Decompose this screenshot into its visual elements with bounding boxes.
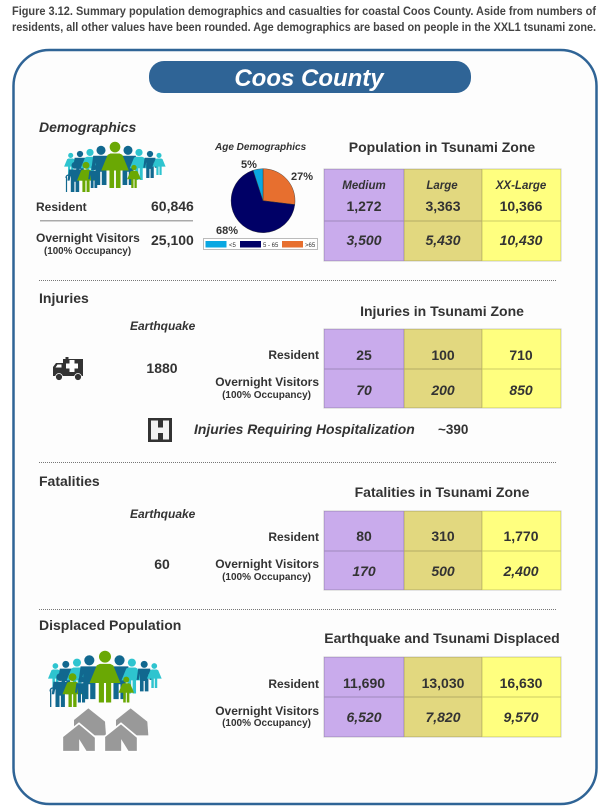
table: population in tsunami zone: XX-Large (495, 180, 547, 192)
caption (12, 6, 596, 34)
row labels: displaced: (100% Occupancy) (222, 718, 311, 729)
section: demographics (36, 119, 194, 257)
table: injuries in tsunami zone: 710 (509, 347, 533, 363)
pie chart: age demographics: 27% (291, 171, 313, 183)
row labels: displaced: Resident (268, 677, 319, 691)
row labels: displaced (215, 677, 319, 729)
value: earthquake injuries: 1880 (146, 360, 178, 376)
label: earthquake fatalities: Earthquake (130, 507, 196, 521)
table: population in tsunami zone: Large (426, 180, 458, 192)
table: fatalities in tsunami zone (324, 511, 561, 590)
heading: population in tsunami zone: Population in Tsunami Zone (349, 139, 535, 155)
heading: injuries in tsunami zone: Injuries in Tsunami Zone (360, 303, 524, 319)
row labels: injuries: (100% Occupancy) (222, 390, 311, 401)
row labels: injuries (215, 348, 319, 401)
pie chart: age demographics: 5% (241, 159, 257, 171)
table: injuries in tsunami zone: 200 (430, 382, 455, 398)
table: fatalities in tsunami zone: 80 (356, 528, 372, 544)
overnight visitors count: 25,100 (151, 232, 194, 248)
row labels: fatalities: Resident (268, 530, 319, 544)
chart legend: 5 - 65 (263, 243, 279, 249)
table: fatalities in tsunami zone: 310 (431, 528, 455, 544)
table: population in tsunami zone: 3,363 (425, 198, 461, 214)
table: earthquake and tsunami displaced: 16,630 (500, 675, 543, 691)
title banner (149, 61, 471, 93)
table: injuries in tsunami zone: 100 (431, 347, 455, 363)
table: injuries in tsunami zone: 25 (356, 347, 372, 363)
value: earthquake fatalities: 60 (154, 556, 170, 572)
resident count: Resident (36, 200, 87, 214)
table: earthquake and tsunami displaced: 11,690 (343, 675, 385, 691)
pie chart: age demographics: Age Demographics (214, 142, 307, 153)
icon: hospital (148, 418, 172, 442)
table: population in tsunami zone (324, 169, 561, 261)
icon: crowd of people (64, 142, 166, 192)
label: earthquake injuries: Earthquake (130, 319, 196, 333)
table: population in tsunami zone: 10,430 (500, 232, 543, 248)
overnight visitors count: Overnight Visitors (36, 231, 140, 245)
heading: fatalities: Fatalities (39, 473, 100, 489)
chart legend (204, 238, 318, 250)
hospitalization label: Injuries Requiring Hospitalization (194, 421, 415, 437)
overnight visitors count: (100% Occupancy) (44, 246, 131, 257)
title banner: Coos County (234, 65, 385, 92)
pie chart: age demographics (204, 142, 318, 250)
heading: demographics: Demographics (39, 119, 136, 135)
table: earthquake and tsunami displaced: 7,820 (425, 709, 461, 725)
heading: earthquake and tsunami displaced: Earthquake and Tsunami Displaced (324, 630, 560, 646)
table: fatalities in tsunami zone: 1,770 (503, 528, 539, 544)
table: population in tsunami zone: 5,430 (425, 232, 461, 248)
section: injuries (39, 290, 319, 401)
heading: displaced population: Displaced Population (39, 617, 181, 633)
chart legend: >65 (305, 243, 316, 249)
icon: ambulance (53, 357, 83, 380)
pie chart: age demographics: 68% (216, 225, 238, 237)
table: population in tsunami zone: 10,366 (500, 198, 543, 214)
table: injuries in tsunami zone: 850 (509, 382, 533, 398)
row labels: fatalities (215, 530, 319, 583)
resident count (36, 198, 194, 214)
row labels: injuries: Overnight Visitors (215, 375, 319, 389)
icon: crowd of people, displaced (48, 651, 162, 707)
table: population in tsunami zone: 3,500 (346, 232, 382, 248)
table: fatalities in tsunami zone: 2,400 (502, 563, 539, 579)
row labels: displaced: Overnight Visitors (215, 704, 319, 718)
table: earthquake and tsunami displaced: 13,030 (422, 675, 465, 691)
row labels: injuries: Resident (268, 348, 319, 362)
table: fatalities in tsunami zone: 170 (352, 563, 376, 579)
chart legend: <5 (229, 243, 237, 249)
icon: houses (62, 708, 148, 752)
row labels: fatalities: Overnight Visitors (215, 557, 319, 571)
heading: fatalities in tsunami zone: Fatalities in Tsunami Zone (355, 484, 530, 500)
table: fatalities in tsunami zone: 500 (431, 563, 455, 579)
section: displaced population (39, 617, 319, 752)
table: injuries in tsunami zone: 70 (356, 382, 372, 398)
table: earthquake and tsunami displaced: 6,520 (346, 709, 382, 725)
table: earthquake and tsunami displaced: 9,570 (503, 709, 539, 725)
resident count: 60,846 (151, 198, 194, 214)
heading: injuries: Injuries (39, 290, 89, 306)
table: earthquake and tsunami displaced (324, 657, 561, 737)
overnight visitors count (36, 231, 194, 257)
table: population in tsunami zone: 1,272 (346, 198, 382, 214)
table: injuries in tsunami zone (324, 329, 561, 408)
section: fatalities (39, 473, 319, 583)
hospitalization value: ~390 (438, 422, 468, 437)
hospitalization callout (148, 418, 468, 442)
row labels: fatalities: (100% Occupancy) (222, 572, 311, 583)
table: population in tsunami zone: Medium (342, 180, 386, 192)
